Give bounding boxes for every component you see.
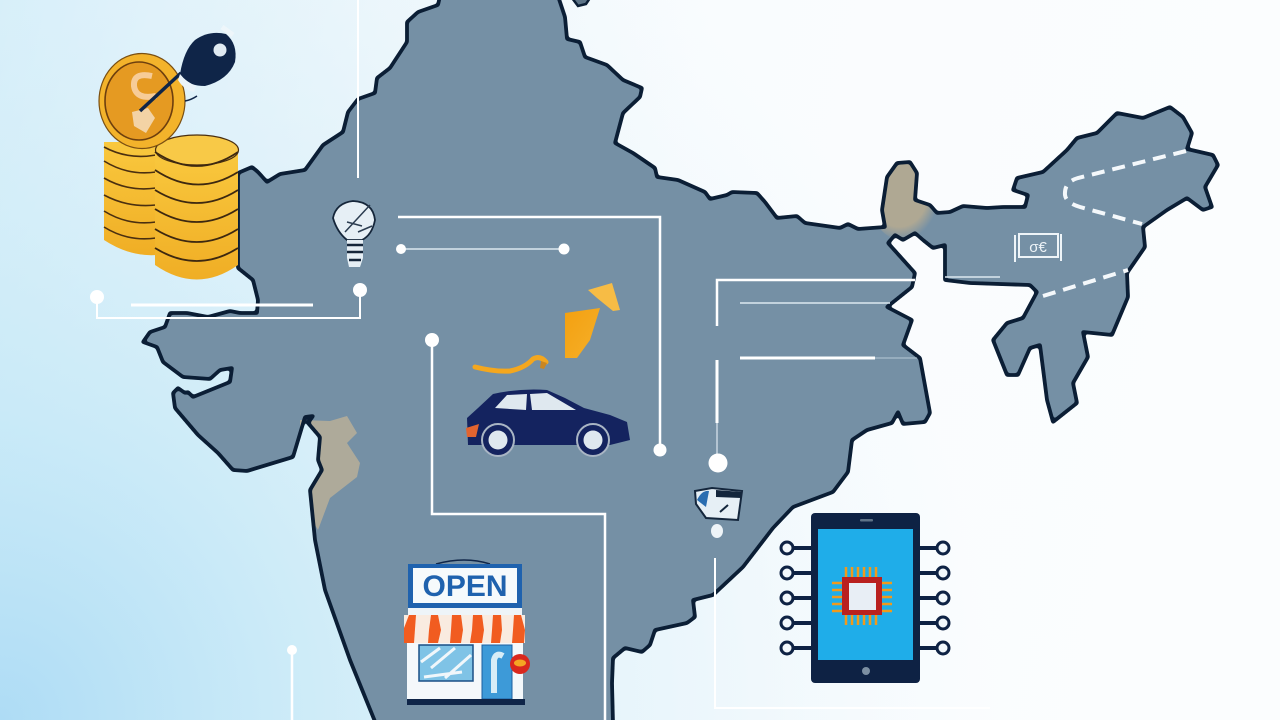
shop sign: OPEN bbox=[422, 570, 508, 603]
shop sign bbox=[408, 564, 522, 608]
icon: light bulb bbox=[333, 201, 375, 267]
icon: coin stacks with key bbox=[99, 27, 238, 280]
circuit pins bbox=[781, 542, 949, 654]
icon: open shop bbox=[404, 560, 530, 705]
icon: smartphone with chip bbox=[781, 513, 949, 683]
shop window bbox=[419, 645, 473, 681]
connector dots bbox=[90, 244, 728, 655]
left coin stack bbox=[104, 142, 157, 255]
red lantern bbox=[510, 654, 530, 674]
key bbox=[140, 27, 236, 111]
awning bbox=[404, 615, 525, 643]
microchip bbox=[832, 567, 892, 625]
chart arrow: rising growth bbox=[475, 283, 620, 371]
northeast dashed borders bbox=[1043, 151, 1186, 296]
icon: banknote symbol bbox=[1015, 234, 1061, 262]
right coin stack bbox=[155, 135, 238, 280]
icon: small device badge bbox=[695, 488, 742, 538]
icon: banknote symbol: σ€ bbox=[1029, 239, 1047, 256]
large coin bbox=[99, 54, 185, 148]
icon: car bbox=[466, 390, 630, 456]
connector lines bbox=[97, 0, 1000, 720]
shop door bbox=[482, 645, 512, 699]
